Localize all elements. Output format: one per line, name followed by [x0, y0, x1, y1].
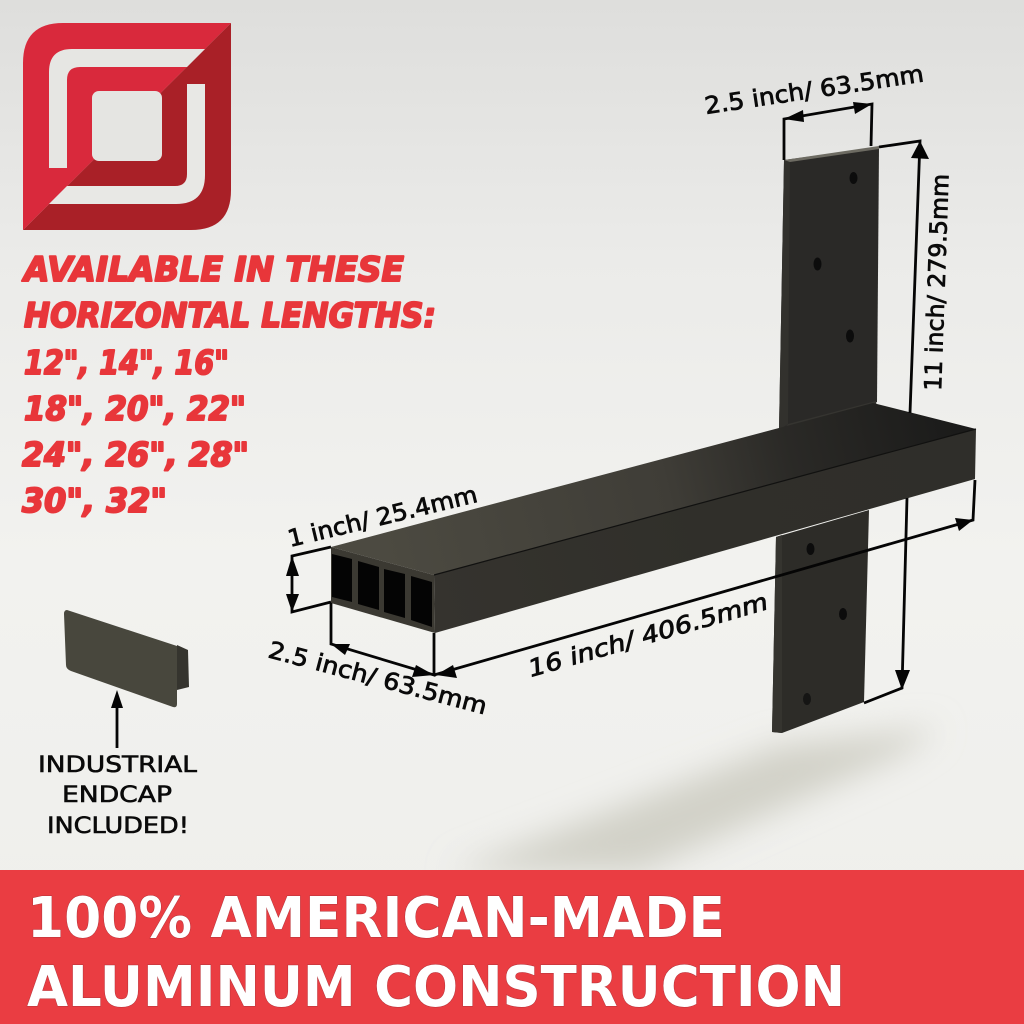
banner: ALUMINUM CONSTRUCTION: [27, 955, 845, 1020]
arm front edge: [434, 429, 976, 575]
banner: [0, 870, 1024, 1024]
dimension: arm width: [265, 603, 490, 720]
arrow to endcap: [111, 690, 123, 748]
floor shadow: [450, 728, 940, 872]
endcap: [64, 610, 189, 707]
dimension: vertical height: 11 inch/ 279.5mm: [919, 173, 955, 391]
endcap caption: [38, 752, 198, 839]
horizontal arm side face: [434, 429, 976, 633]
dimension: horizontal length: 16 inch/ 406.5mm: [525, 587, 771, 683]
bracket: [331, 146, 976, 733]
endcap caption: ENDCAP: [62, 782, 172, 808]
banner: 100% AMERICAN-MADE: [27, 886, 725, 951]
endcap caption: INDUSTRIAL: [38, 752, 198, 778]
dimension: vertical height: [864, 141, 955, 703]
dimension: horizontal length: [434, 480, 975, 683]
dimension: arm width: 2.5 inch/ 63.5mm: [265, 636, 490, 720]
heading: available lengths: 30", 32": [22, 481, 167, 520]
upper vertical plate: [779, 146, 879, 434]
heading: available lengths: 12", 14", 16": [24, 343, 229, 382]
heading: available lengths: 18", 20", 22": [24, 389, 246, 428]
dimension: top width: 2.5 inch/ 63.5mm: [703, 60, 925, 120]
lower vertical plate: [772, 510, 869, 733]
logo: [23, 23, 231, 230]
dimension: top width: [703, 60, 925, 160]
horizontal arm end face: [331, 547, 435, 633]
horizontal arm top face: [331, 403, 976, 575]
heading: available lengths: 24", 26", 28": [22, 435, 249, 474]
dimension: arm thickness: 1 inch/ 25.4mm: [285, 480, 480, 553]
heading: available lengths: [21, 250, 436, 520]
heading: available lengths: HORIZONTAL LENGTHS:: [24, 296, 436, 336]
dimension: arm thickness: [285, 480, 480, 612]
heading: available lengths: AVAILABLE IN THESE: [21, 250, 404, 290]
endcap caption: INCLUDED!: [47, 813, 189, 839]
